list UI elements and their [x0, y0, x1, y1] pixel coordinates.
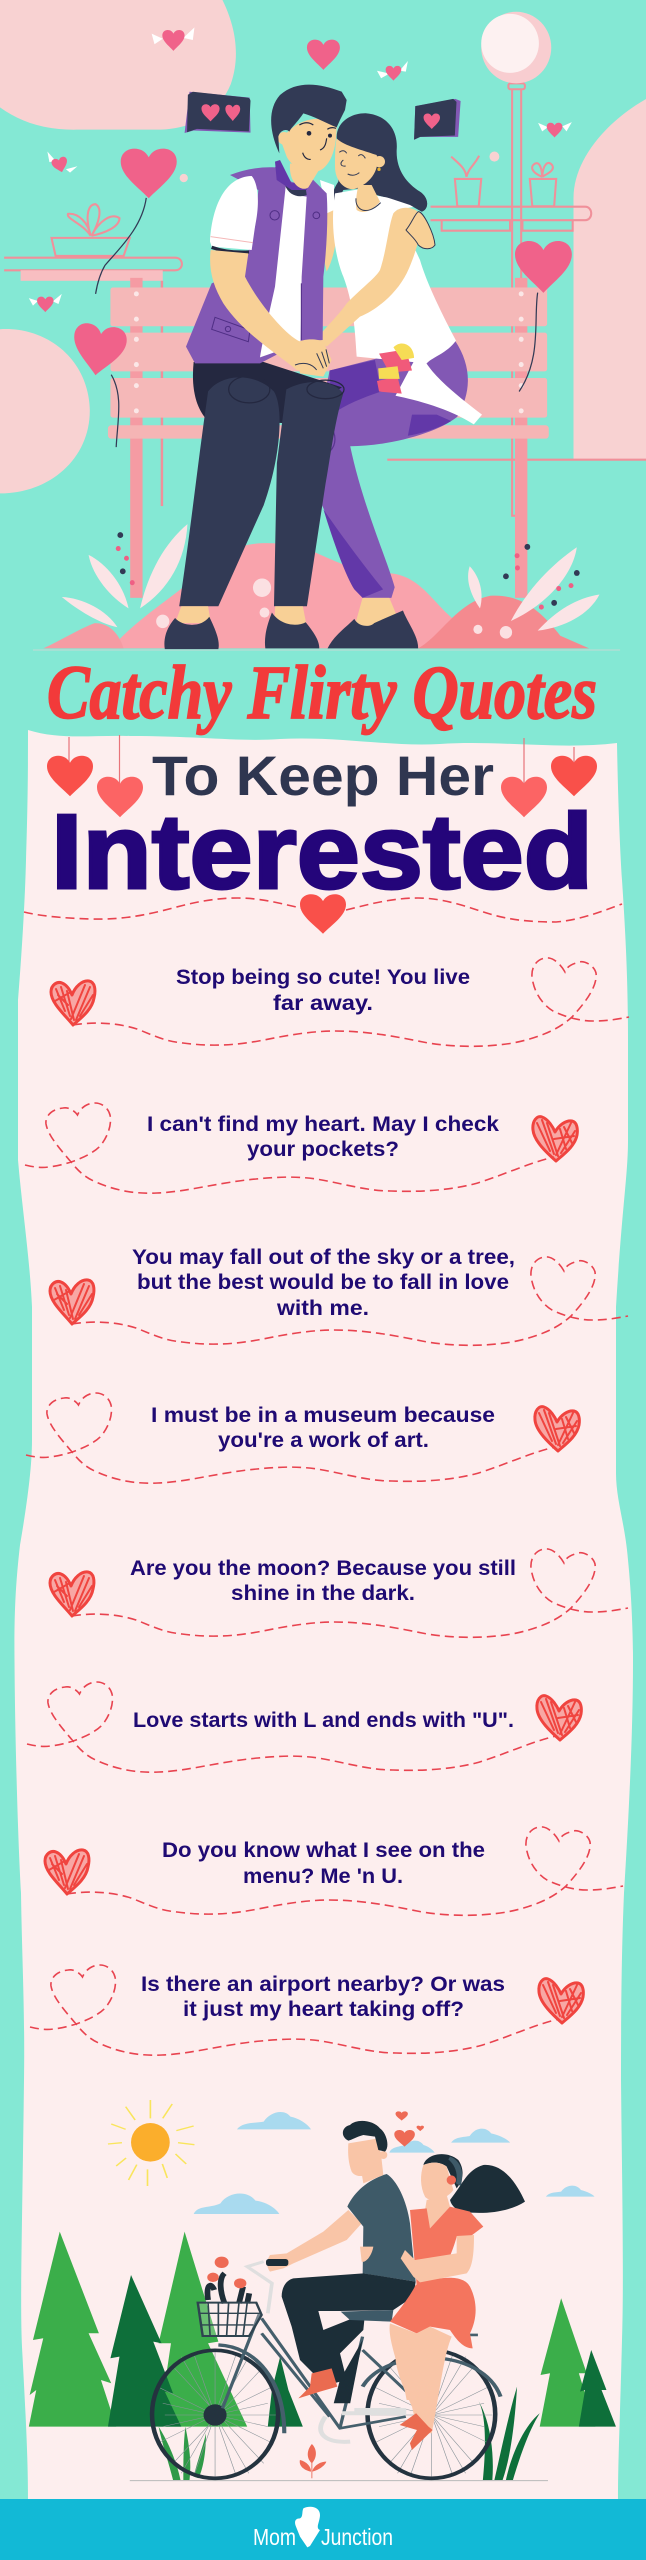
floating hearts [394, 2111, 424, 2147]
flower bouquet [377, 343, 482, 424]
man's neck and head [271, 85, 347, 189]
quote 7: menu? Me 'n U. [243, 1865, 403, 1888]
quote 3: with me. [276, 1297, 369, 1320]
man's dark trousers [179, 362, 344, 606]
heading: Interested: Interested [51, 793, 593, 911]
quote 3 [50, 1246, 628, 1345]
quote 4 [26, 1393, 579, 1483]
quote 4: I must be in a museum because [151, 1404, 495, 1427]
heart balloons [69, 149, 572, 447]
background pink blobs [0, 0, 646, 493]
footer bar [0, 2499, 646, 2560]
left shelf with bowl plant [4, 204, 182, 270]
ground mounds and leaves [33, 524, 620, 651]
quote 1 [51, 958, 629, 1046]
clouds [194, 2112, 595, 2214]
quote 8: Is there an airport nearby? Or was [141, 1973, 505, 1996]
man riding [266, 2121, 416, 2398]
quote 5: shine in the dark. [231, 1582, 415, 1605]
basket with flowers [198, 2257, 262, 2336]
subtitle: To Keep Her: To Keep Her [152, 744, 494, 807]
illustration: cycling scene background [29, 2100, 616, 2481]
woman's purple trousers [302, 341, 468, 598]
quote 5: Are you the moon? Because you still [130, 1557, 516, 1580]
shoes [164, 598, 418, 649]
man's arm behind the woman [320, 180, 337, 272]
right shelf with pots [387, 156, 646, 460]
quote 3: but the best would be to fall in love [137, 1271, 509, 1294]
speech bubble: two hearts [185, 92, 250, 133]
man's arm [210, 250, 328, 375]
quote 5 [50, 1549, 628, 1637]
hair falling over her shoulder [375, 180, 427, 212]
woman's face [335, 138, 385, 189]
quote 2: I can't find my heart. May I check [147, 1113, 499, 1136]
quote 2: your pockets? [247, 1138, 399, 1161]
bicycle frame [222, 2262, 478, 2442]
woman's neck and necklace [356, 185, 381, 212]
woman's hair [332, 113, 427, 212]
man's vest [186, 160, 327, 363]
clasped hands [295, 339, 332, 377]
man's sleeve [210, 176, 258, 252]
woman riding [390, 2154, 525, 2400]
lamp post [481, 12, 551, 516]
lower legs and shoes [334, 2340, 449, 2450]
divider with heart [24, 894, 622, 934]
quote 6: Love starts with L and ends with "U". [133, 1709, 514, 1732]
quote 2 [25, 1103, 577, 1193]
woman's white top [333, 189, 456, 363]
quote 7: Do you know what I see on the [162, 1839, 485, 1862]
hanging hearts [47, 735, 597, 817]
quote 8: it just my heart taking off? [183, 1998, 464, 2021]
quote 8 [30, 1965, 583, 2055]
illustration: park scene behind the couple [0, 0, 646, 651]
sun [108, 2100, 194, 2186]
bicycle wheels [152, 2345, 501, 2478]
ground line and flower sprig [130, 2444, 548, 2481]
MomJunction logo [253, 2507, 393, 2550]
quote 7 [45, 1827, 623, 1915]
grass [159, 2387, 540, 2480]
MomJunction logo: Junction [321, 2524, 393, 2550]
quote 6 [27, 1682, 581, 1772]
winged hearts [29, 27, 572, 312]
quote 4: you're a work of art. [218, 1429, 429, 1452]
speech bubble: one heart [414, 99, 461, 140]
bench [108, 278, 549, 598]
paper panel [14, 730, 633, 2500]
couple on the bicycle [266, 2121, 525, 2400]
pine trees [29, 2232, 616, 2427]
quote 3: You may fall out of the sky or a tree, [132, 1246, 515, 1269]
quote 1: Stop being so cute! You live [176, 966, 470, 989]
man's hand on her shoulder [406, 212, 435, 249]
MomJunction logo: Mom [253, 2524, 296, 2550]
woman's arm [317, 208, 421, 347]
quote 1: far away. [273, 992, 373, 1015]
couple upper bodies [186, 85, 456, 377]
